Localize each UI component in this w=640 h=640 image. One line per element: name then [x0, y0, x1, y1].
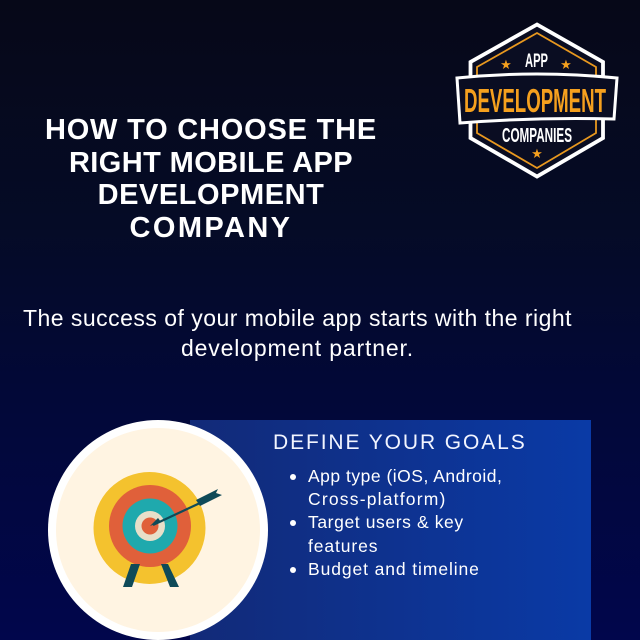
bullet list: App type (iOS, Android,: [308, 466, 502, 486]
badge stars: ★: [500, 58, 512, 73]
title: HOW TO CHOOSE THE: [45, 114, 377, 146]
bullet list: Target users & key: [308, 512, 464, 532]
subtitle: The success of your mobile app starts with the right: [23, 305, 572, 331]
arrow: [150, 489, 222, 526]
logo badge: [455, 22, 619, 179]
title: COMPANY: [130, 212, 292, 244]
heading: define your goals: DEFINE YOUR GOALS: [273, 431, 527, 454]
target legs: [123, 564, 179, 587]
badge stars: ★: [560, 58, 572, 73]
title: [45, 114, 377, 244]
bullet list: [290, 466, 502, 579]
subtitle: [23, 305, 572, 361]
icon: target with arrow: [48, 420, 268, 640]
bullet list: features: [308, 536, 378, 556]
text: APP: APP: [525, 51, 548, 72]
target rings: [94, 472, 206, 584]
badge banner: [457, 74, 617, 123]
text: COMPANIES: COMPANIES: [502, 125, 572, 147]
title: RIGHT MOBILE APP: [69, 147, 353, 179]
bullet list: Budget and timeline: [308, 559, 480, 579]
icon circle: [48, 420, 268, 640]
badge stars: ★: [531, 147, 543, 162]
bullet list: Cross-platform): [308, 489, 447, 509]
badge stars: [500, 58, 572, 162]
subtitle: development partner.: [181, 335, 414, 361]
panel: define your goals: [190, 420, 591, 640]
badge hexagon: [470, 24, 603, 176]
title: DEVELOPMENT: [98, 179, 324, 211]
